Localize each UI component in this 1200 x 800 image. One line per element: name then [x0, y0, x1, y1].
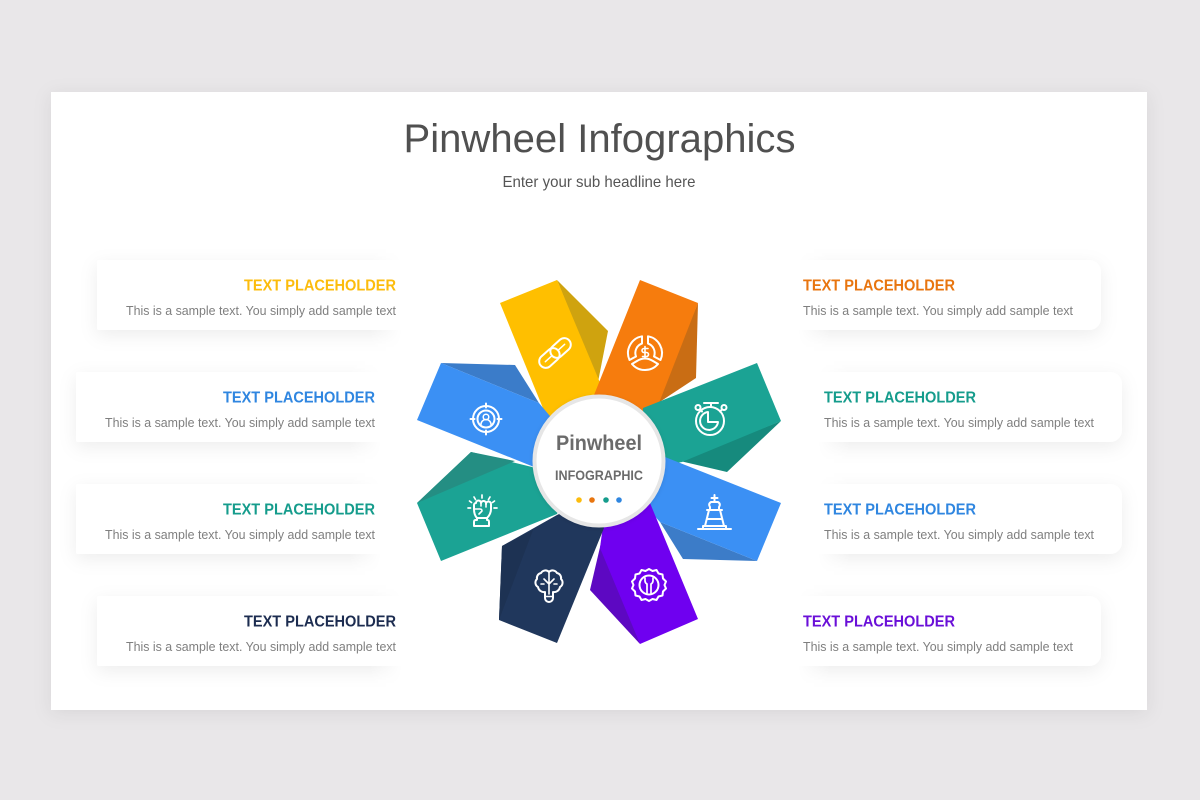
pinwheel blade: yellow [500, 280, 608, 440]
card: blue right text block [824, 504, 1122, 560]
card: orange text block [803, 280, 1102, 336]
icon: brain bulb [535, 570, 563, 602]
title: Pinwheel Infographics [404, 117, 796, 161]
card: orange text block: TEXT PLACEHOLDER [803, 278, 955, 294]
subtitle: Enter your sub headline here [502, 174, 696, 191]
card: yellow text block [96, 280, 396, 336]
pinwheel blade: teal left [417, 452, 570, 561]
pinwheel blade: blue right [640, 457, 781, 561]
hub subtitle: INFOGRAPHIC [555, 467, 643, 483]
icon: dollar segments [628, 336, 662, 370]
icon: stopwatch [696, 403, 726, 435]
card: teal text block: TEXT PLACEHOLDER [223, 502, 375, 518]
icon: gear wrench [632, 569, 666, 601]
card: purple text block: TEXT PLACEHOLDER [803, 614, 955, 630]
icon: raised fist [468, 495, 497, 526]
pinwheel blade: purple [590, 503, 698, 644]
card: yellow text block: This is a sample text. You simply add sample text [126, 304, 397, 318]
center hub [534, 396, 664, 526]
hub title: Pinwheel [556, 432, 642, 455]
icon: chain link [537, 335, 573, 371]
card: purple text block [803, 616, 1102, 672]
card: teal right text block [824, 392, 1122, 448]
card: yellow text block: TEXT PLACEHOLDER [244, 278, 396, 294]
slide panel [51, 92, 1147, 710]
pinwheel blade: orange [594, 280, 698, 430]
card: teal right text block: This is a sample text. You simply add sample text [824, 416, 1095, 430]
card: blue text block: TEXT PLACEHOLDER [223, 390, 375, 406]
card: teal text block [76, 504, 375, 560]
icon: chess king [698, 495, 731, 529]
card: blue right text block: TEXT PLACEHOLDER [824, 502, 976, 518]
card: teal text block: This is a sample text. You simply add sample text [105, 528, 376, 542]
pinwheel blade: teal right [640, 363, 781, 472]
card: blue text block [76, 392, 375, 448]
card: blue text block: This is a sample text. You simply add sample text [105, 416, 376, 430]
card: orange text block: This is a sample text. You simply add sample text [803, 304, 1074, 318]
card: navy text block: TEXT PLACEHOLDER [244, 614, 396, 630]
card: purple text block: This is a sample text. You simply add sample text [803, 640, 1074, 654]
pinwheel blade: blue left [417, 363, 570, 467]
card: navy text block: This is a sample text. You simply add sample text [126, 640, 397, 654]
pinwheel blade: navy [499, 500, 604, 643]
hub dots [576, 497, 622, 503]
card: teal right text block: TEXT PLACEHOLDER [824, 390, 976, 406]
card: navy text block [96, 616, 396, 672]
card: blue right text block: This is a sample text. You simply add sample text [824, 528, 1095, 542]
icon: target person [470, 404, 502, 434]
